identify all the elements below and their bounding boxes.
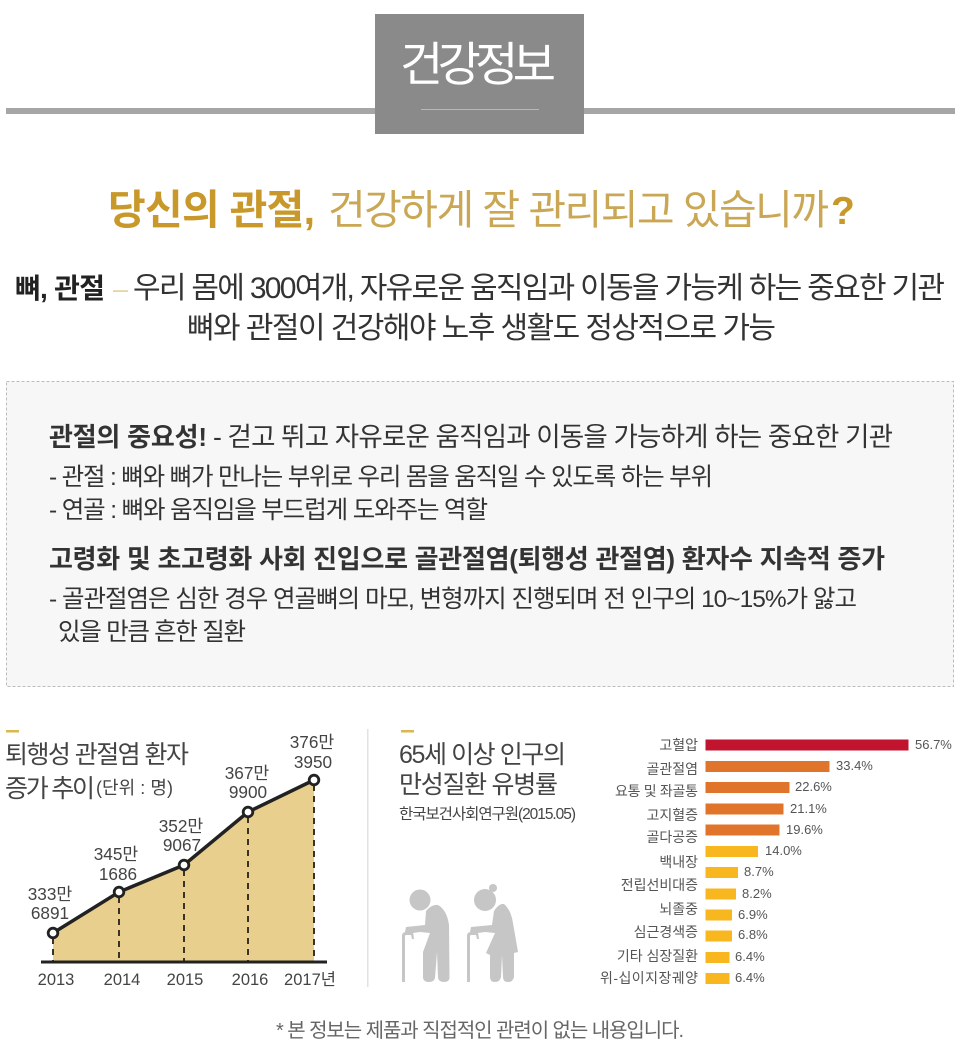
category labels: 뇌졸중 (659, 901, 698, 917)
text block: importance of joints (49, 422, 893, 524)
value labels: 6.4% (735, 970, 765, 985)
text block: osteoarthritis: - 골관절염은 심한 경우 연골뼈의 마모, 변형까지 진행되며 전 인구의 10~15%가 앓고 (49, 585, 857, 613)
data labels: 9900 (229, 782, 267, 802)
value labels: 6.9% (738, 907, 768, 922)
headline: 당신의 관절, (108, 187, 315, 233)
intro text: 뼈와 관절이 건강해야 노후 생활도 정상적으로 가능 (187, 312, 776, 345)
text block: importance of joints: 관절의 중요성! (49, 422, 207, 452)
title: 건강정보 (400, 38, 556, 91)
data labels: 6891 (31, 903, 69, 923)
year axis labels (38, 970, 336, 989)
value labels: 6.4% (735, 949, 765, 964)
chart heading: 증가 추이 (5, 775, 95, 803)
chart heading: (단위 : 명) (96, 778, 173, 798)
data labels: 376만 (290, 732, 334, 752)
value labels: 21.1% (790, 801, 827, 816)
text block: importance of joints: - 걷고 뛰고 자유로운 움직임과 이동을 가능하게 하는 중요한 기관 (213, 422, 893, 452)
year axis labels: 2016 (232, 971, 268, 989)
intro text: 뼈, 관절 (15, 273, 105, 304)
data labels: 1686 (99, 864, 137, 884)
chart heading (5, 741, 189, 803)
chart heading (399, 741, 576, 823)
category labels: 요통 및 좌골통 (615, 783, 698, 799)
data labels: 333만 (28, 884, 72, 904)
value labels: 8.2% (742, 886, 772, 901)
panel: osteoarthritis patient trend (5, 730, 336, 989)
data labels: 367만 (225, 763, 269, 783)
text block: importance of joints: - 관절 : 뼈와 뼈가 만나는 부위로 우리 몸을 움직일 수 있도록 하는 부위 (49, 463, 713, 491)
value labels: 22.6% (795, 779, 832, 794)
chart heading: 한국보건사회연구원(2015.05) (399, 805, 576, 823)
value labels: 14.0% (765, 843, 802, 858)
value labels: 8.7% (744, 864, 774, 879)
value labels (735, 737, 952, 985)
chart heading: 만성질환 유병률 (399, 771, 558, 799)
chart heading: 퇴행성 관절염 환자 (5, 741, 189, 769)
year axis labels: 2014 (104, 971, 140, 989)
year axis labels: 2017년 (284, 970, 336, 989)
headline (108, 187, 855, 233)
category labels: 골관절염 (646, 761, 698, 777)
category labels: 위-십이지장궤양 (600, 970, 698, 986)
data labels: 345만 (94, 844, 138, 864)
category labels (600, 737, 698, 986)
panel: joint importance (6, 382, 954, 686)
value labels: 19.6% (786, 822, 823, 837)
text block: importance of joints: - 연골 : 뼈와 움직임을 부드럽게 도와주는 역할 (49, 496, 488, 524)
year axis labels: 2015 (167, 971, 203, 989)
category labels: 심근경색증 (634, 924, 698, 940)
line chart (28, 732, 336, 989)
value labels: 56.7% (915, 737, 952, 752)
headline: ? (831, 190, 855, 233)
bars (706, 740, 908, 984)
bar chart (600, 737, 952, 986)
value labels: 33.4% (836, 758, 873, 773)
intro text: 우리 몸에 300여개, 자유로운 움직임과 이동을 가능케 하는 중요한 기관 (133, 272, 945, 305)
text block: osteoarthritis: 있을 만큼 흔한 질환 (58, 618, 246, 646)
category labels: 고지혈증 (646, 807, 698, 823)
data labels: 9067 (163, 835, 201, 855)
data labels: 352만 (159, 816, 203, 836)
intro text (15, 272, 945, 345)
text block: osteoarthritis (49, 544, 885, 646)
category labels: 백내장 (659, 854, 698, 870)
category labels: 전립선비대증 (621, 877, 698, 893)
year axis labels: 2013 (38, 971, 74, 989)
category labels: 골다공증 (646, 829, 698, 845)
value labels: 6.8% (738, 927, 768, 942)
icon: elderly couple with canes (402, 884, 518, 982)
chart heading: 65세 이상 인구의 (399, 741, 566, 769)
headline: 건강하게 잘 관리되고 있습니까 (328, 187, 829, 233)
category labels: 기타 심장질환 (617, 948, 698, 964)
text block: osteoarthritis: 고령화 및 초고령화 사회 진입으로 골관절염(퇴행성 관절염) 환자수 지속적 증가 (49, 544, 885, 574)
data labels (28, 732, 334, 923)
footnote: * 본 정보는 제품과 직접적인 관련이 없는 내용입니다. (276, 1019, 684, 1042)
category labels: 고혈압 (659, 737, 698, 753)
panel: chronic disease prevalence (399, 730, 952, 986)
intro text: – (113, 274, 128, 304)
header with title tab (6, 14, 955, 134)
data labels: 3950 (294, 752, 332, 772)
